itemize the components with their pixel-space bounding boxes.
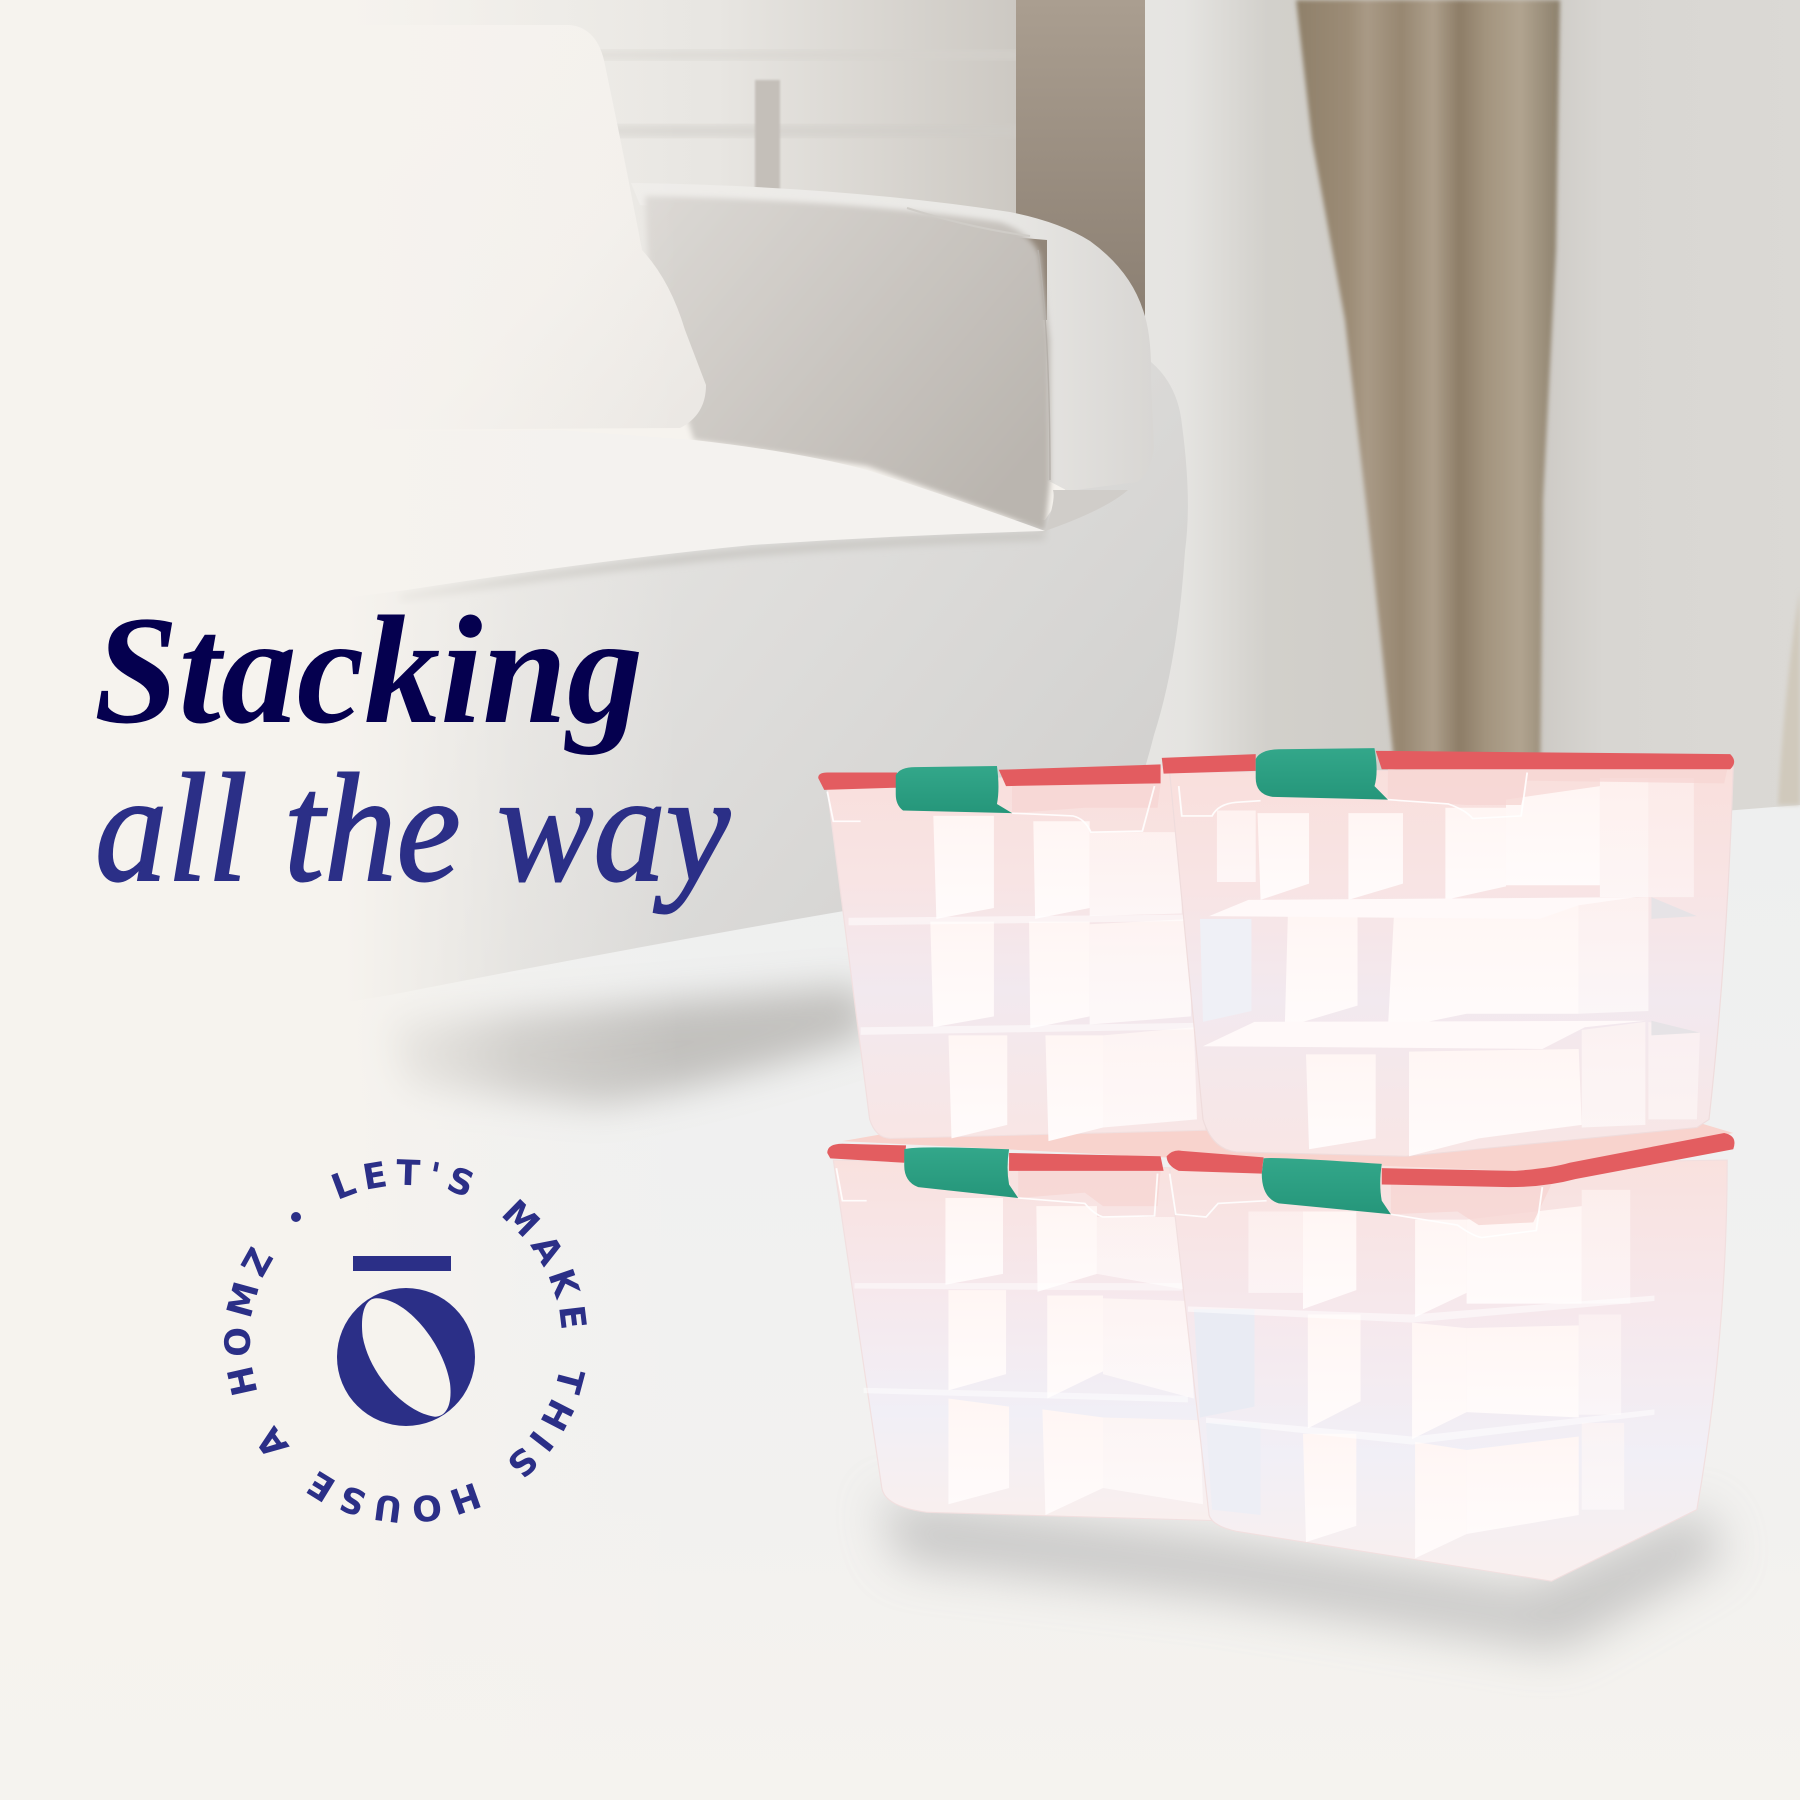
top lid rims (818, 751, 1734, 790)
bottom latches (904, 1147, 1391, 1214)
bottom right box (1170, 1160, 1727, 1581)
title line 1: Stacking (94, 584, 643, 756)
far right drape (1778, 590, 1800, 805)
under-lid pink bands (1012, 767, 1727, 1225)
top right box (1170, 767, 1733, 1156)
blue side wall shade (1200, 919, 1251, 1022)
bottom left box (833, 1160, 1212, 1520)
pillow (330, 25, 706, 430)
logo macron bar (353, 1256, 451, 1271)
arm top roll (631, 183, 1154, 491)
arm underside fold (1045, 490, 1128, 531)
shelf one (1209, 897, 1636, 919)
arm fold (907, 208, 1030, 236)
product: stacked storage boxes (818, 748, 1734, 1650)
top latches (896, 748, 1388, 813)
arm seam (1038, 250, 1050, 480)
sofa floor shadow (380, 985, 870, 1105)
seat shadow (400, 536, 1045, 598)
box shadow on floor (880, 1500, 1725, 1650)
circular tagline: LET'S MAKE THIS HOUSE A HOMZ (224, 1159, 587, 1523)
wall (1100, 0, 1800, 860)
left fade overlay (0, 0, 800, 1800)
shelf two (1203, 1021, 1645, 1049)
sofa front body (330, 362, 1188, 1005)
sofa (330, 25, 1188, 1005)
logo letter o (337, 1288, 475, 1426)
curtain (1296, 0, 1560, 800)
arm inner panel (645, 196, 1050, 531)
bottom lids top surface (842, 1122, 1733, 1171)
seat cushion (330, 430, 1045, 600)
badge dot (291, 1212, 301, 1222)
bottom lid rims (827, 1133, 1734, 1187)
brown wall band (1016, 0, 1145, 320)
floor (330, 805, 1800, 1800)
bottom fade overlay (0, 1500, 1800, 1800)
title (94, 584, 730, 914)
stacked boxes artwork (818, 748, 1734, 1581)
top left box (827, 767, 1206, 1141)
latch rims (827, 773, 1542, 1238)
far headboard (330, 0, 1030, 320)
logo badge (224, 1159, 587, 1523)
title line 2: all the way (95, 742, 730, 914)
grey corner shades (1651, 897, 1700, 1035)
blue side wall shade (1194, 1309, 1254, 1418)
blue side wall shade lower (1206, 1423, 1261, 1515)
